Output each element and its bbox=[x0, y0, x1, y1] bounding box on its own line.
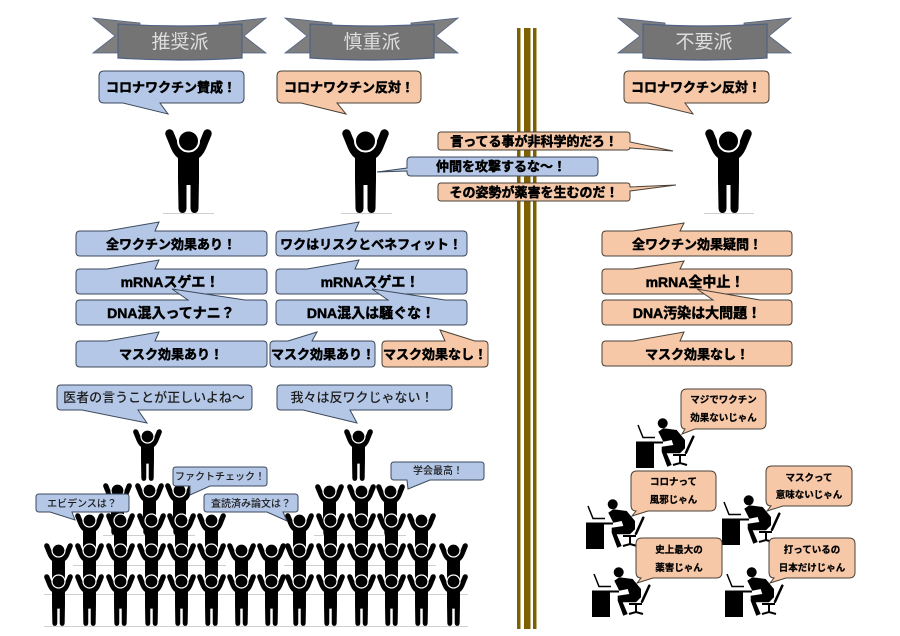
bubble: マスク効果なし column 2: マスク効果なし！ bbox=[383, 347, 487, 362]
banner: 不要派 bbox=[618, 18, 791, 60]
bubble: 不要派 コロナワクチン反対 bbox=[624, 71, 769, 114]
bubble: DNA混入は騒ぐな: DNA混入は騒ぐな！ bbox=[307, 305, 435, 321]
center divider bbox=[517, 28, 536, 629]
bubble: コロナワクチン賛成: コロナワクチン賛成！ bbox=[106, 80, 236, 95]
bubble: 我々は反ワクじゃない: 我々は反ワクじゃない！ bbox=[290, 390, 434, 405]
worker: middle right bbox=[722, 495, 779, 545]
worker: bottom left bbox=[592, 567, 649, 617]
bubble: DNA汚染は大問題 bbox=[602, 289, 792, 325]
bubble: 仲間を攻撃するな bbox=[377, 157, 598, 176]
bubble: マスク効果なし column 3 bbox=[602, 332, 792, 366]
bubble: マスク効果なし column 3: マスク効果なし！ bbox=[645, 347, 749, 362]
worker: top bbox=[636, 418, 693, 468]
figure: 慎重派 leader bbox=[341, 130, 392, 214]
bubble: エビデンスは bbox=[36, 494, 129, 520]
bubble: マジでワクチン効果ないじゃん: 効果ないじゃん bbox=[690, 412, 757, 424]
bubble: ファクトチェック bbox=[173, 467, 267, 495]
bubble: その姿勢が薬害を生むのだ bbox=[438, 183, 676, 201]
bubble: 慎重派 コロナワクチン反対: コロナワクチン反対！ bbox=[284, 80, 414, 95]
bubble: 不要派 コロナワクチン反対: コロナワクチン反対！ bbox=[631, 80, 761, 95]
worker: middle left bbox=[586, 499, 643, 549]
bubble: mRNAスゲエ column 2: mRNAスゲエ！ bbox=[321, 274, 419, 290]
bubble: コロナって風邪じゃん: 風邪じゃん bbox=[650, 494, 698, 506]
figure: 不要派 leader bbox=[704, 130, 754, 214]
banner: 不要派: 不要派 bbox=[675, 32, 733, 53]
bubble: DNA混入ってナニ: DNA混入ってナニ？ bbox=[107, 305, 235, 321]
bubble: マスク効果あり: マスク効果あり！ bbox=[119, 347, 223, 362]
bubble: 仲間を攻撃するな: 仲間を攻撃するな〜！ bbox=[436, 159, 566, 174]
bubble: 打っているの日本だけじゃん bbox=[769, 538, 855, 583]
bubble: 史上最大の薬害じゃん bbox=[636, 538, 722, 583]
bubble: 言ってる事が非科学的だろ: 言ってる事が非科学的だろ！ bbox=[450, 134, 618, 149]
bubble: ワクはリスクとベネフィット bbox=[276, 222, 467, 256]
bubble: その姿勢が薬害を生むのだ: その姿勢が薬害を生むのだ！ bbox=[449, 185, 619, 200]
bubble: コロナって風邪じゃん bbox=[631, 471, 716, 516]
bubble: 打っているの日本だけじゃん: 打っているの bbox=[784, 544, 840, 556]
bubble: ファクトチェック: ファクトチェック！ bbox=[175, 471, 265, 483]
bubble: mRNAスゲエ column 2 bbox=[276, 260, 467, 294]
banner: 慎重派: 慎重派 bbox=[343, 31, 401, 53]
banner: 慎重派 bbox=[285, 18, 458, 60]
bubble: マスクって意味ないじゃん: 意味ないじゃん bbox=[776, 489, 843, 501]
bubble: 全ワクチン効果あり: 全ワクチン効果あり！ bbox=[106, 237, 236, 252]
bubble: マジでワクチン効果ないじゃん bbox=[681, 389, 766, 434]
bubble: mRNAスゲエ: mRNAスゲエ！ bbox=[121, 274, 219, 290]
banner: 推奨派: 推奨派 bbox=[151, 31, 209, 53]
bubble: マスク効果なし column 2 bbox=[382, 330, 488, 367]
bubble: 全ワクチン効果あり bbox=[76, 222, 267, 256]
figure: 推奨派 leader bbox=[163, 130, 214, 214]
bubble: DNA混入は騒ぐな bbox=[276, 289, 467, 325]
bubble: マスクって意味ないじゃん: マスクって bbox=[785, 473, 833, 484]
banner: 推奨派 bbox=[93, 18, 266, 60]
bubble: DNA混入ってナニ bbox=[76, 289, 267, 325]
bubble: mRNA全中止 bbox=[602, 261, 792, 294]
bubble: 学会最高 bbox=[391, 462, 484, 489]
bubble: マスク効果あり bbox=[76, 332, 267, 367]
bubble: エビデンスは: エビデンスは？ bbox=[47, 497, 117, 510]
bubble: マスク効果あり column 2 bbox=[270, 332, 375, 367]
bubble: 学会最高: 学会最高！ bbox=[413, 464, 463, 477]
bubble: 医者の言うことが正しいよね: 医者の言うことが正しいよね〜 bbox=[63, 390, 245, 405]
bubble: ワクはリスクとベネフィット: ワクはリスクとベネフィット！ bbox=[280, 237, 462, 252]
bubble: 医者の言うことが正しいよね bbox=[57, 385, 252, 423]
bubble: マスクって意味ないじゃん bbox=[766, 466, 852, 511]
bubble: 査読済み論文は bbox=[204, 494, 298, 521]
bubble: DNA汚染は大問題: DNA汚染は大問題！ bbox=[633, 305, 761, 321]
bubble: mRNA全中止: mRNA全中止！ bbox=[646, 274, 744, 290]
bubble: マスク効果あり column 2: マスク効果あり！ bbox=[271, 347, 375, 362]
bubble: mRNAスゲエ bbox=[76, 260, 267, 294]
bubble: コロナって風邪じゃん: コロナって bbox=[650, 477, 697, 488]
worker: bottom right bbox=[725, 567, 782, 617]
crowd: 慎重派 pyramid bbox=[255, 430, 468, 626]
bubble: 全ワクチン効果疑問: 全ワクチン効果疑問！ bbox=[632, 237, 762, 252]
bubble: 全ワクチン効果疑問 bbox=[602, 223, 792, 256]
bubble: 史上最大の薬害じゃん: 薬害じゃん bbox=[655, 562, 703, 574]
bubble: 史上最大の薬害じゃん: 史上最大の bbox=[655, 544, 703, 556]
bubble: 我々は反ワクじゃない bbox=[277, 385, 452, 423]
bubble: コロナワクチン賛成 bbox=[99, 71, 244, 114]
bubble: 打っているの日本だけじゃん: 日本だけじゃん bbox=[779, 562, 846, 574]
crowd: 推奨派 pyramid bbox=[44, 430, 255, 626]
bubble: マジでワクチン効果ないじゃん: マジでワクチン bbox=[690, 395, 757, 406]
bubble: 言ってる事が非科学的だろ bbox=[438, 132, 673, 151]
bubble: 査読済み論文は: 査読済み論文は？ bbox=[211, 497, 291, 510]
bubble: 慎重派 コロナワクチン反対 bbox=[277, 71, 421, 114]
